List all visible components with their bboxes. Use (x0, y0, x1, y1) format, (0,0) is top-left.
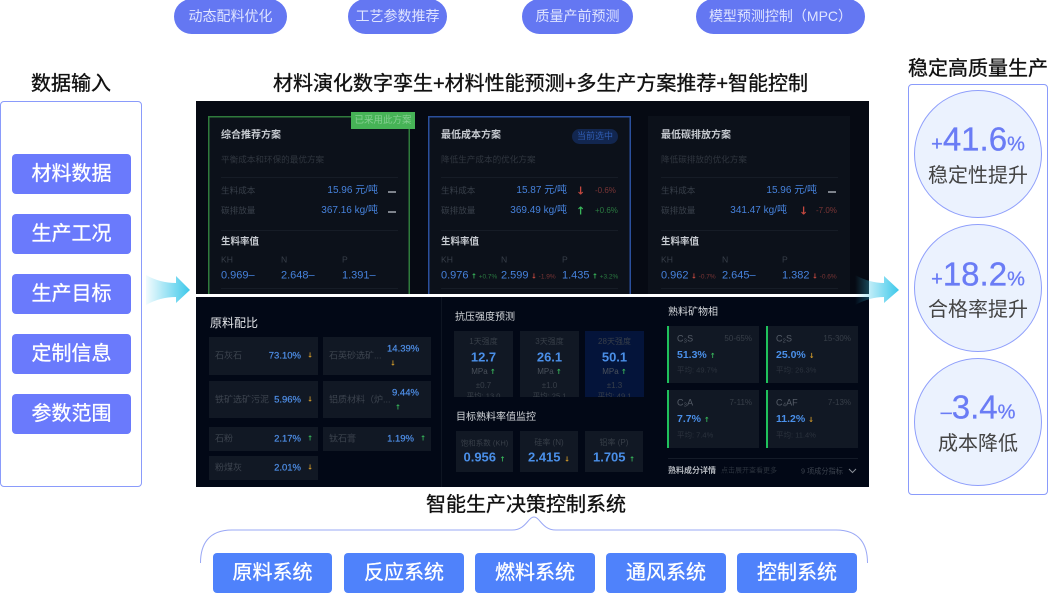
tile: 1天强度 (454, 331, 513, 397)
button: 材料数据 (12, 154, 131, 194)
tile: C2S (766, 326, 858, 383)
arrow: carbon down: ↓ (799, 204, 808, 218)
value: P: 1.382 ↓ -0.6% (782, 270, 837, 282)
label: N: N (722, 255, 728, 265)
system: 控制系统: 控制系统 (757, 562, 837, 584)
name: C₃A (677, 398, 693, 408)
pill: 质量产前预测: 质量产前预测 (536, 8, 620, 24)
range: 15-30% (823, 334, 851, 343)
name: 铝质材料（炉... (329, 394, 391, 404)
button: 参数范围: 参数范围 (32, 403, 112, 425)
badge: 已采用此方案 (351, 112, 415, 129)
cell: 粉煤灰 (209, 456, 318, 480)
name: C₄AF (776, 398, 798, 408)
icon: chevron (848, 468, 856, 474)
name: C₃S (677, 334, 693, 344)
trend: ↑ (420, 434, 426, 442)
unit: MPa ↑ (537, 367, 562, 376)
arrow: input to dashboard (146, 275, 190, 305)
panel: data input (0, 101, 142, 487)
pill: 工艺参数推荐 (348, 0, 447, 34)
value: 1.19% (387, 433, 414, 444)
value: 73.10% (269, 350, 301, 361)
value: 2.17% (274, 433, 301, 444)
name: C₂S (776, 334, 792, 344)
button: 生产目标: 生产目标 (32, 283, 112, 305)
range: ±0.7 (476, 381, 491, 390)
cell: 铝质材料 (323, 381, 431, 418)
subheading: 生料率值: 生料率值 (441, 236, 479, 247)
label: N: N (501, 255, 507, 265)
footer hint: 点击展开查看更多 (721, 468, 777, 474)
label: 碳排放量: 碳排放量 (441, 206, 475, 216)
caption: 合格率提升 (928, 299, 1028, 321)
delta: carbon: -7.0% (816, 206, 837, 215)
heading: 智能生产决策控制系统: 智能生产决策控制系统 (426, 494, 626, 516)
pill: 工艺参数推荐: 工艺参数推荐 (356, 8, 440, 24)
range: 7-11% (729, 398, 752, 407)
arrow: dashboard to results (856, 276, 899, 304)
label: P: P (782, 255, 788, 265)
value: P: 1.391– (342, 270, 376, 282)
system: 反应系统: 反应系统 (364, 562, 444, 584)
tile: N (520, 431, 578, 472)
name: 钛石膏 (329, 434, 356, 444)
heading: 数据输入: 数据输入 (31, 73, 111, 95)
card title: 最低碳排放方案 (661, 130, 731, 141)
range: ±1.3 (607, 381, 622, 390)
system: 反应系统 (344, 553, 464, 593)
cell: 石粉 (209, 427, 318, 451)
value: P: 1.435 ↑ +3.2% (562, 270, 618, 282)
button: 生产工况: 生产工况 (32, 223, 112, 245)
number: –3.4% (941, 388, 1015, 426)
label: 3天强度 (535, 337, 564, 346)
footer count: 9 项成分指标 (801, 466, 843, 475)
label: 铝率 (P) (600, 438, 628, 447)
value: 11.2% ↓ (776, 413, 814, 425)
subheading: 生料率值: 生料率值 (661, 236, 699, 247)
name: 粉煤灰 (215, 462, 242, 472)
cell: 钛石膏 (323, 427, 431, 451)
value: 50.1 (602, 350, 627, 364)
name: 石粉 (215, 434, 233, 444)
value: 12.7 (471, 350, 496, 364)
heading: 熟料矿物相: 熟料矿物相 (668, 307, 718, 318)
label: 生料成本: 生料成本 (221, 186, 255, 196)
average: 平均: 7.4% (677, 430, 713, 439)
heading: 稳定高质量生产: 稳定高质量生产 (908, 58, 1048, 80)
label: KH: KH (661, 255, 673, 265)
panel: stable production results (908, 84, 1048, 495)
tile: 3天强度 (520, 331, 579, 397)
trend: ↓ (390, 360, 396, 368)
system: 原料系统 (213, 553, 332, 593)
heading: 抗压强度预测: 抗压强度预测 (455, 312, 515, 323)
value: cost: 15.96 元/吨 (766, 185, 817, 196)
card: 综合推荐方案 (208, 116, 410, 306)
caption: 成本降低 (938, 433, 1018, 455)
label: 1天强度 (469, 337, 498, 346)
value: carbon: 367.16 kg/吨 (321, 205, 378, 216)
trend: ↑ (307, 434, 313, 442)
trend: ↓ (307, 352, 313, 360)
metric: 成本降低 (914, 358, 1042, 486)
main title: 材料演化数字孪生+材料性能预测+多生产方案推荐+智能控制 (273, 73, 808, 95)
pill: 动态配料优化: 动态配料优化 (188, 8, 272, 24)
panel: scheme comparison dashboard (196, 101, 869, 294)
number: +41.6% (931, 120, 1025, 158)
card description: 降低生产成本的优化方案 (441, 155, 536, 165)
caption: 稳定性提升 (928, 165, 1028, 187)
name: 铁矿选矿污泥 (215, 394, 269, 404)
average: 平均: 49.7% (677, 365, 717, 374)
value: N: 2.599 ↓ -1.9% (501, 270, 556, 282)
cell: 铁矿选矿污泥 (209, 381, 318, 418)
button: 定制信息: 定制信息 (32, 343, 112, 365)
value: 0.956 ↑ (463, 450, 506, 464)
card description: 平衡成本和环保的最优方案 (221, 155, 324, 165)
system: 燃料系统 (475, 553, 595, 593)
tile: C3A (667, 390, 759, 448)
value: N: 2.648– (281, 270, 315, 282)
cell: 石英砂选矿 (323, 337, 431, 375)
card: 最低碳排放方案 (648, 116, 850, 306)
arrow: carbon up: ↑ (576, 204, 585, 218)
button: 生产目标 (12, 274, 131, 314)
range: ±1.0 (542, 381, 557, 390)
heading: 目标熟料率值监控: 目标熟料率值监控 (456, 412, 536, 423)
card title: 最低成本方案 (441, 130, 501, 141)
value: cost: 15.87 元/吨 (516, 185, 567, 196)
badge: 当前选中 (572, 129, 618, 144)
value: 2.01% (274, 462, 301, 473)
label: N: N (281, 255, 287, 265)
section: 熟料矿物相 (667, 306, 858, 475)
tile: 28天强度 (585, 331, 644, 397)
unit: MPa ↑ (602, 367, 627, 376)
label: P: P (342, 255, 348, 265)
section: 抗压强度预测 (454, 311, 644, 397)
badge: 当前选中: 当前选中 (577, 131, 613, 141)
label: P: P (562, 255, 568, 265)
delta: cost: -0.6% (595, 186, 616, 195)
card title: 综合推荐方案 (221, 130, 281, 141)
value: 26.1 (537, 350, 562, 364)
brace (200, 516, 868, 563)
average: 平均: 26.3% (776, 365, 816, 374)
range: 7-13% (828, 398, 851, 407)
label: 碳排放量: 碳排放量 (661, 206, 695, 216)
tile: C3S (667, 326, 759, 383)
value: carbon: 341.47 kg/吨 (730, 205, 787, 216)
label: 饱和系数 (KH) (461, 438, 508, 447)
button: 材料数据: 材料数据 (32, 163, 112, 185)
panel: production monitoring dashboard (196, 297, 869, 487)
value: cost: 15.96 元/吨 (327, 185, 378, 196)
trend: ↓ (307, 464, 313, 472)
footer title: 熟料成分详情 (668, 466, 716, 475)
name: 石英砂选矿... (329, 350, 382, 360)
pill: 模型预测控制: 模型预测控制（MPC） (709, 8, 852, 24)
card: 最低成本方案 (428, 116, 631, 306)
label: 生料成本: 生料成本 (441, 186, 475, 196)
label: KH: KH (441, 255, 453, 265)
label: 硅率 (N) (534, 438, 564, 447)
value: KH: 0.962 ↓ -0.7% (661, 270, 716, 282)
arrow: cost down: ↓ (576, 184, 585, 198)
pill: 动态配料优化 (174, 0, 287, 34)
card description: 降低碳排放的优化方案 (661, 155, 747, 165)
heading: 原料配比: 原料配比 (210, 316, 258, 330)
system: 原料系统: 原料系统 (232, 562, 312, 584)
value: 14.39% (387, 343, 419, 354)
section: 原料配比 (209, 316, 431, 480)
tile: KH (456, 431, 513, 472)
value: 1.705 ↑ (593, 450, 635, 464)
average: 平均: 11.4% (776, 430, 816, 439)
value: 5.96% (274, 394, 301, 405)
value: 7.7% ↑ (677, 413, 710, 425)
tile: C4AF (766, 390, 858, 448)
pill: 质量产前预测 (522, 0, 633, 34)
trend: ↓ (307, 396, 313, 404)
button: 定制信息 (12, 334, 131, 374)
label: 28天强度 (598, 337, 631, 346)
value: 51.3% ↑ (677, 349, 716, 361)
badge: 已采用此方案: 已采用此方案 (354, 115, 412, 126)
label: 生料成本: 生料成本 (661, 186, 695, 196)
delta: carbon: +0.6% (595, 206, 618, 215)
value: 25.0% ↓ (776, 349, 815, 361)
cell: 石灰石 (209, 337, 318, 375)
value: KH: 0.969– (221, 270, 255, 282)
pill: 模型预测控制 (696, 0, 865, 34)
section: 目标熟料率值监控 (456, 411, 643, 472)
metric: 合格率提升 (914, 224, 1042, 352)
name: 石灰石 (215, 350, 242, 360)
range: 50-65% (724, 334, 752, 343)
system: 通风系统 (606, 553, 726, 593)
button: 参数范围 (12, 394, 131, 434)
metric: 稳定性提升 (914, 90, 1042, 218)
label: 碳排放量: 碳排放量 (221, 206, 255, 216)
subheading: 生料率值: 生料率值 (221, 236, 259, 247)
button: 生产工况 (12, 214, 131, 254)
value: KH: 0.976 ↑ +0.7% (441, 270, 497, 282)
unit: MPa ↑ (471, 367, 496, 376)
tile: P (585, 431, 643, 472)
trend: ↑ (395, 404, 401, 412)
value: carbon: 369.49 kg/吨 (510, 205, 567, 216)
value: N: 2.645– (722, 270, 756, 282)
value: 2.415 ↓ (528, 450, 570, 464)
value: 9.44% (392, 387, 419, 398)
system: 燃料系统: 燃料系统 (495, 562, 575, 584)
system: 控制系统 (737, 553, 857, 593)
system: 通风系统: 通风系统 (626, 562, 706, 584)
number: +18.2% (931, 256, 1025, 292)
label: KH: KH (221, 255, 233, 265)
